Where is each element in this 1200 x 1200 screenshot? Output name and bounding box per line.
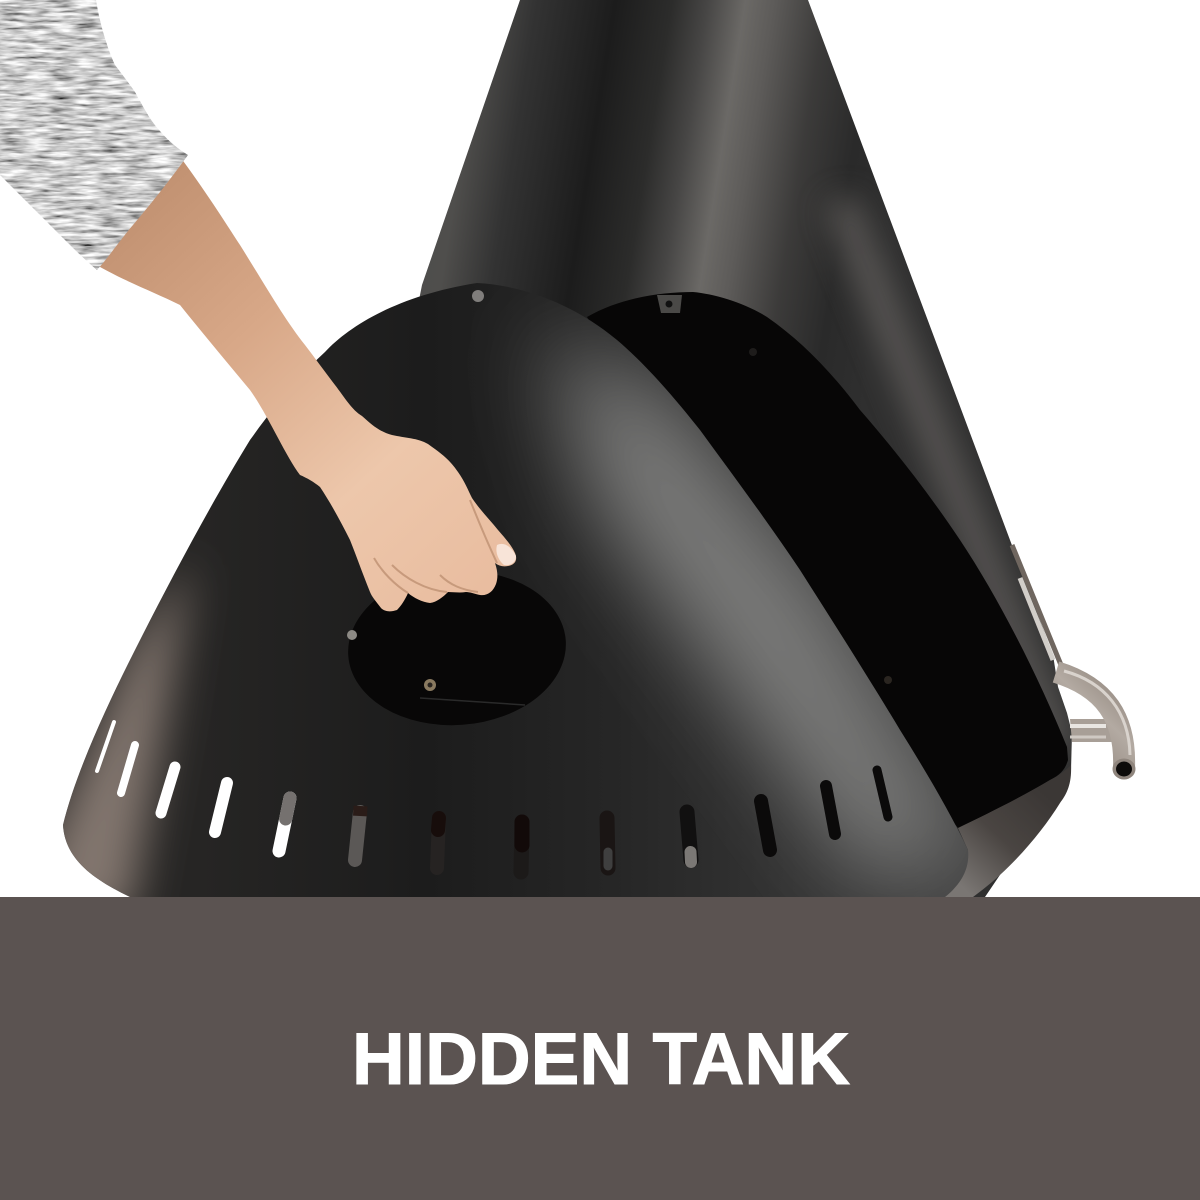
title band [0,897,1200,1200]
door panel [40,270,990,920]
door mounting hole [472,290,484,302]
upper cone body [420,0,1072,897]
oval hand hole [343,564,571,732]
vent slots [97,722,888,872]
heading: hidden tank: HIDDEN TANK [352,1019,850,1100]
product illustration [0,0,1136,897]
open tank compartment [587,292,1071,897]
sweater sleeve [0,0,188,270]
arm and hand [85,150,516,611]
stainless steel burner pipe [1012,545,1136,780]
